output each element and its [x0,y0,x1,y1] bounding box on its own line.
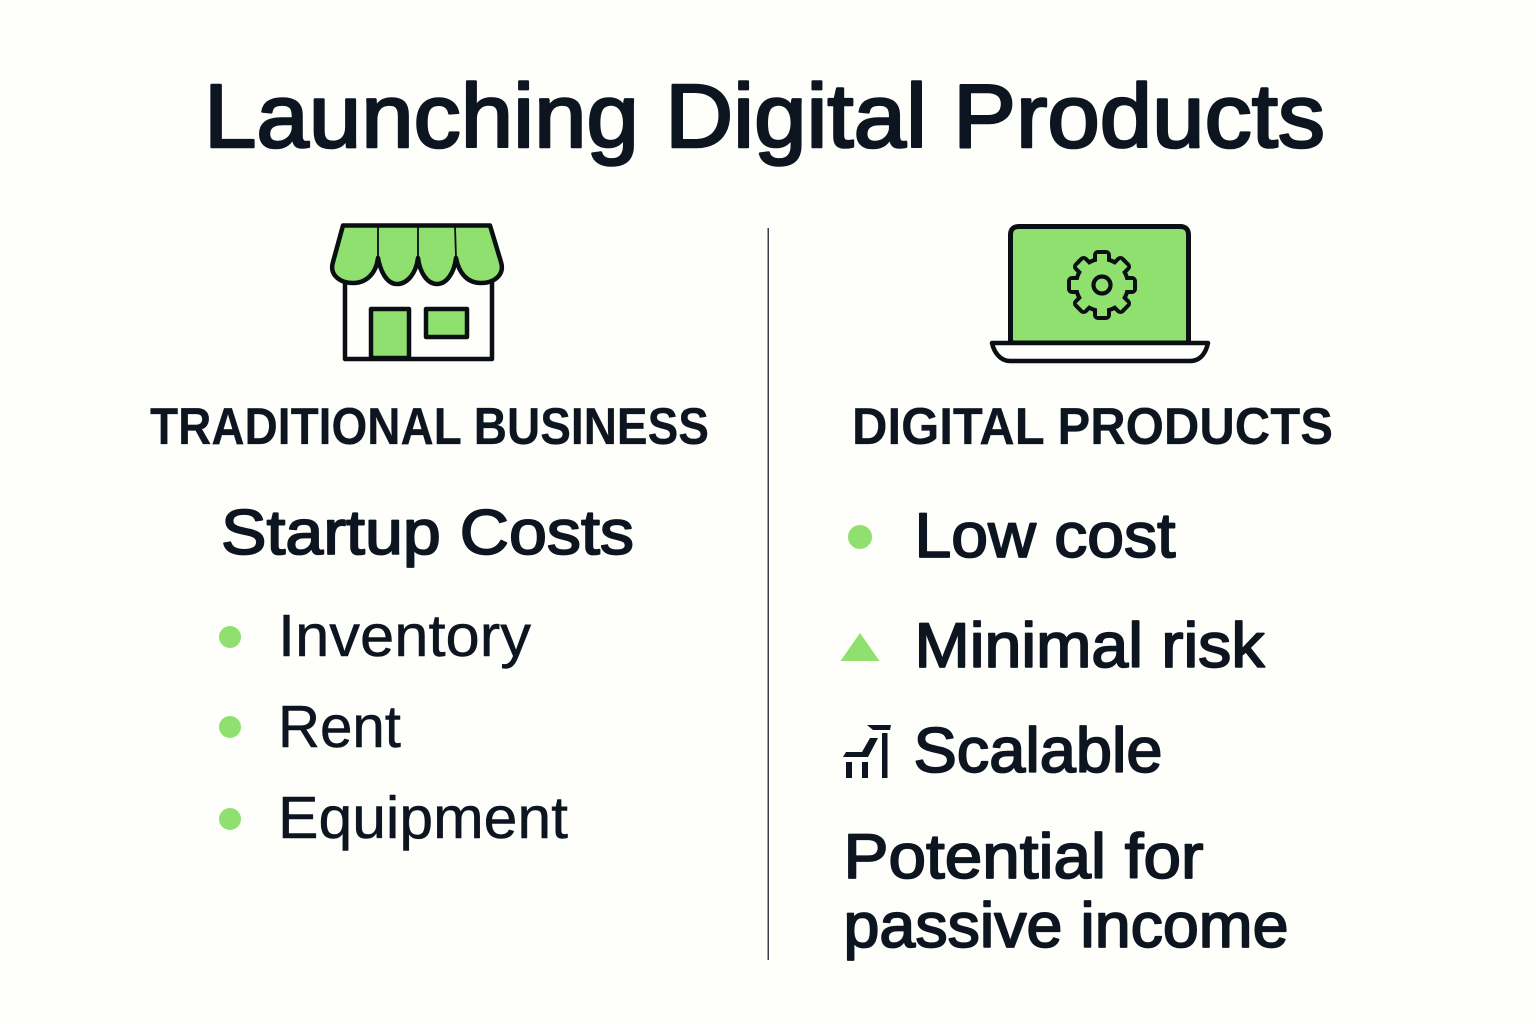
benefit: scalable: Scalable [914,716,1162,786]
subheading: startup costs: Startup Costs [221,498,634,568]
panel: traditional business [150,226,709,851]
benefit: potential for passive income: Potential for [844,822,1204,892]
icon: laptop with gear [992,226,1208,361]
benefit: low cost: Low cost [914,501,1176,571]
title: Launching Digital Products [204,67,1325,167]
benefit: potential for passive income [844,822,1288,961]
heading: digital products: DIGITAL PRODUCTS [852,398,1333,456]
benefit: minimal risk: Minimal risk [914,611,1265,681]
list item: inventory: Inventory [278,603,532,669]
panel: digital products [840,226,1333,961]
heading: traditional business: TRADITIONAL BUSINESS [150,398,709,456]
list item: rent: Rent [278,694,401,760]
icon: growth chart [843,725,891,778]
benefit: potential for passive income: passive income [844,891,1288,961]
list item: rent [219,694,401,760]
center divider [768,228,769,960]
icon: storefront [332,226,502,359]
list item: equipment: Equipment [278,785,568,851]
